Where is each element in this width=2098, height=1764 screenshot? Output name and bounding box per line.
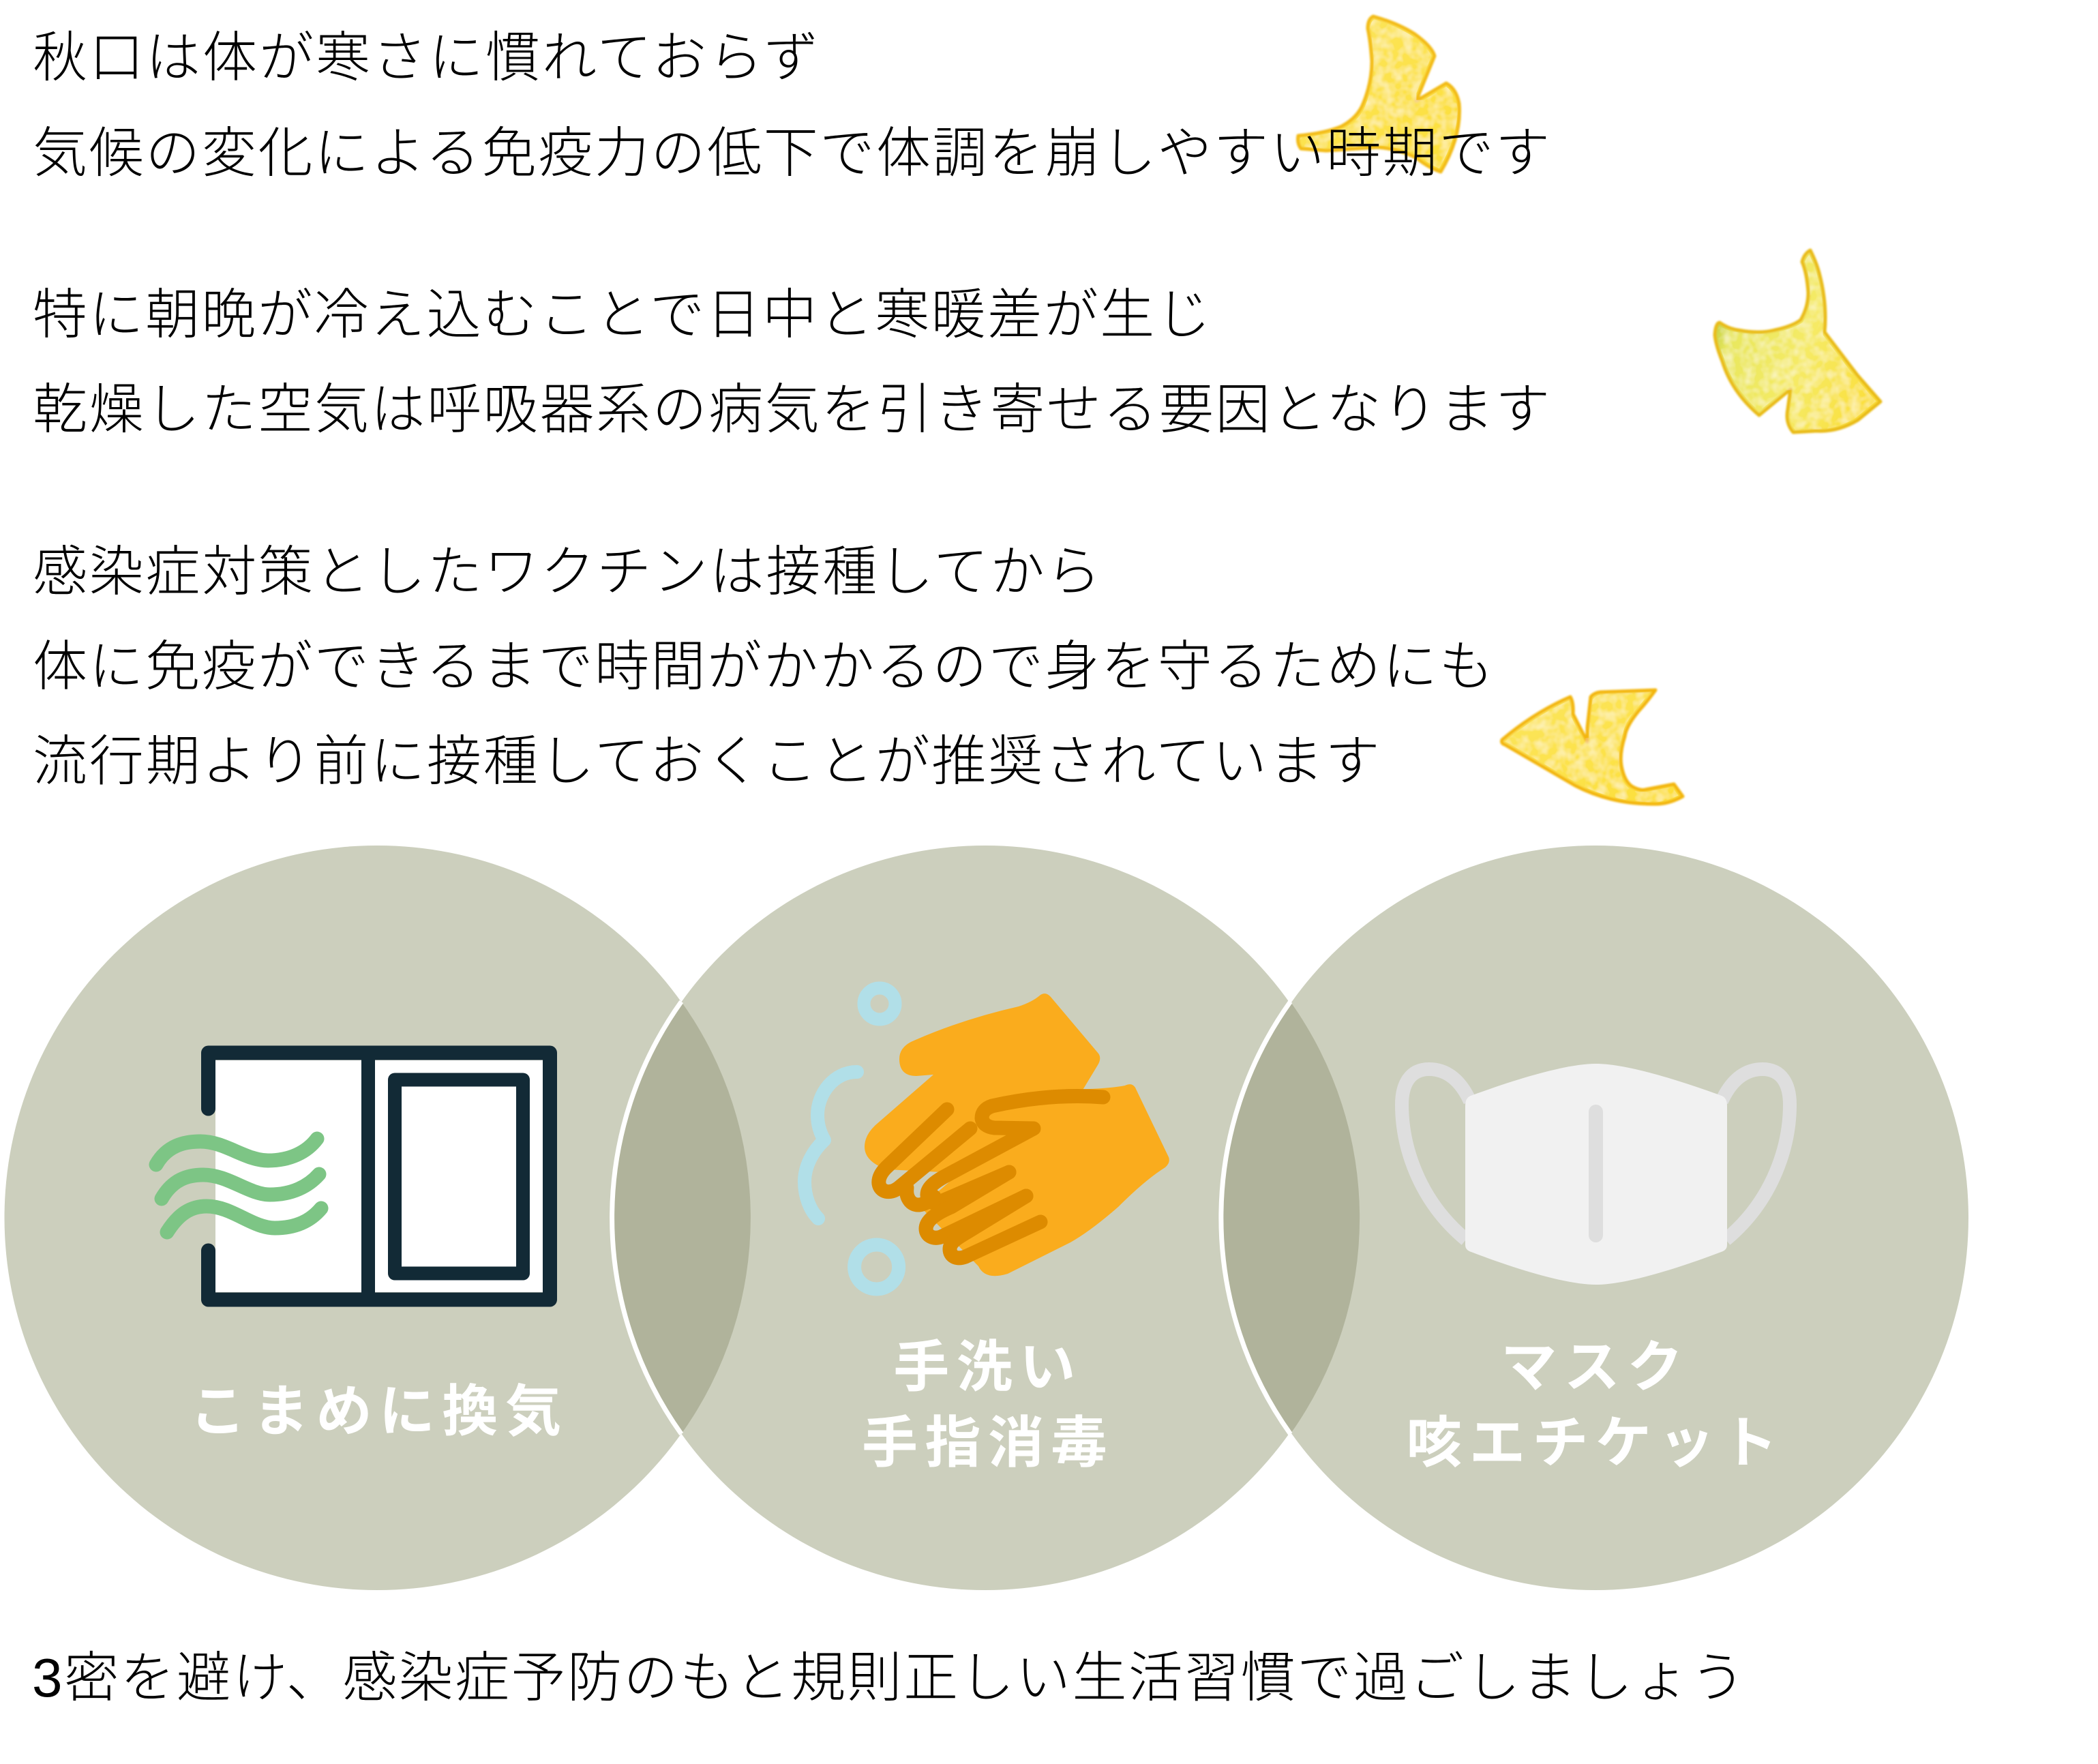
text block: paragraph 2: 特に朝晩が冷え込むことで日中と寒暖差が生じ xyxy=(33,284,1212,345)
text block: paragraph 1: 秋口は体が寒さに慣れておらず xyxy=(33,27,821,88)
icon: ginkgo leaf top xyxy=(1298,16,1459,172)
text block: closing message: 3密を避け、感染症予防のもと規則正しい生活習慣で過ごしましょう xyxy=(32,1647,1747,1708)
icon: ginkgo leaf middle xyxy=(1715,250,1880,432)
text block: paragraph 3: 流行期より前に接種しておくことが推奨されています xyxy=(33,731,1381,792)
text block: paragraph 1: 気候の変化による免疫力の低下で体調を崩しやすい時期です xyxy=(33,123,1552,183)
label: hand washing and sanitizing xyxy=(862,1336,1114,1474)
icon: washing hands xyxy=(805,988,1169,1289)
venn diagram: three overlapping circles xyxy=(4,846,1968,1590)
label: hand washing and sanitizing: 手指消毒 xyxy=(862,1412,1114,1474)
icon: face mask xyxy=(1402,1064,1790,1285)
text block: paragraph 1 xyxy=(33,27,1552,183)
text block: paragraph 3 xyxy=(33,541,1495,792)
label: hand washing and sanitizing: 手洗い xyxy=(893,1336,1083,1399)
label: ventilation: こまめに換気 xyxy=(190,1381,569,1443)
icon: open window with breeze xyxy=(156,1053,550,1300)
text block: paragraph 2: 乾燥した空気は呼吸器系の病気を引き寄せる要因となります xyxy=(33,379,1552,440)
label: mask and cough etiquette: 咳エチケット xyxy=(1406,1412,1785,1474)
text block: paragraph 3: 体に免疫ができるまで時間がかかるので身を守るためにも xyxy=(33,636,1495,697)
icon: ginkgo leaf lower xyxy=(1501,690,1683,804)
label: mask and cough etiquette xyxy=(1406,1336,1785,1474)
text block: paragraph 2 xyxy=(33,284,1552,440)
text block: paragraph 3: 感染症対策としたワクチンは接種してから xyxy=(33,541,1103,602)
label: mask and cough etiquette: マスク xyxy=(1501,1336,1690,1399)
